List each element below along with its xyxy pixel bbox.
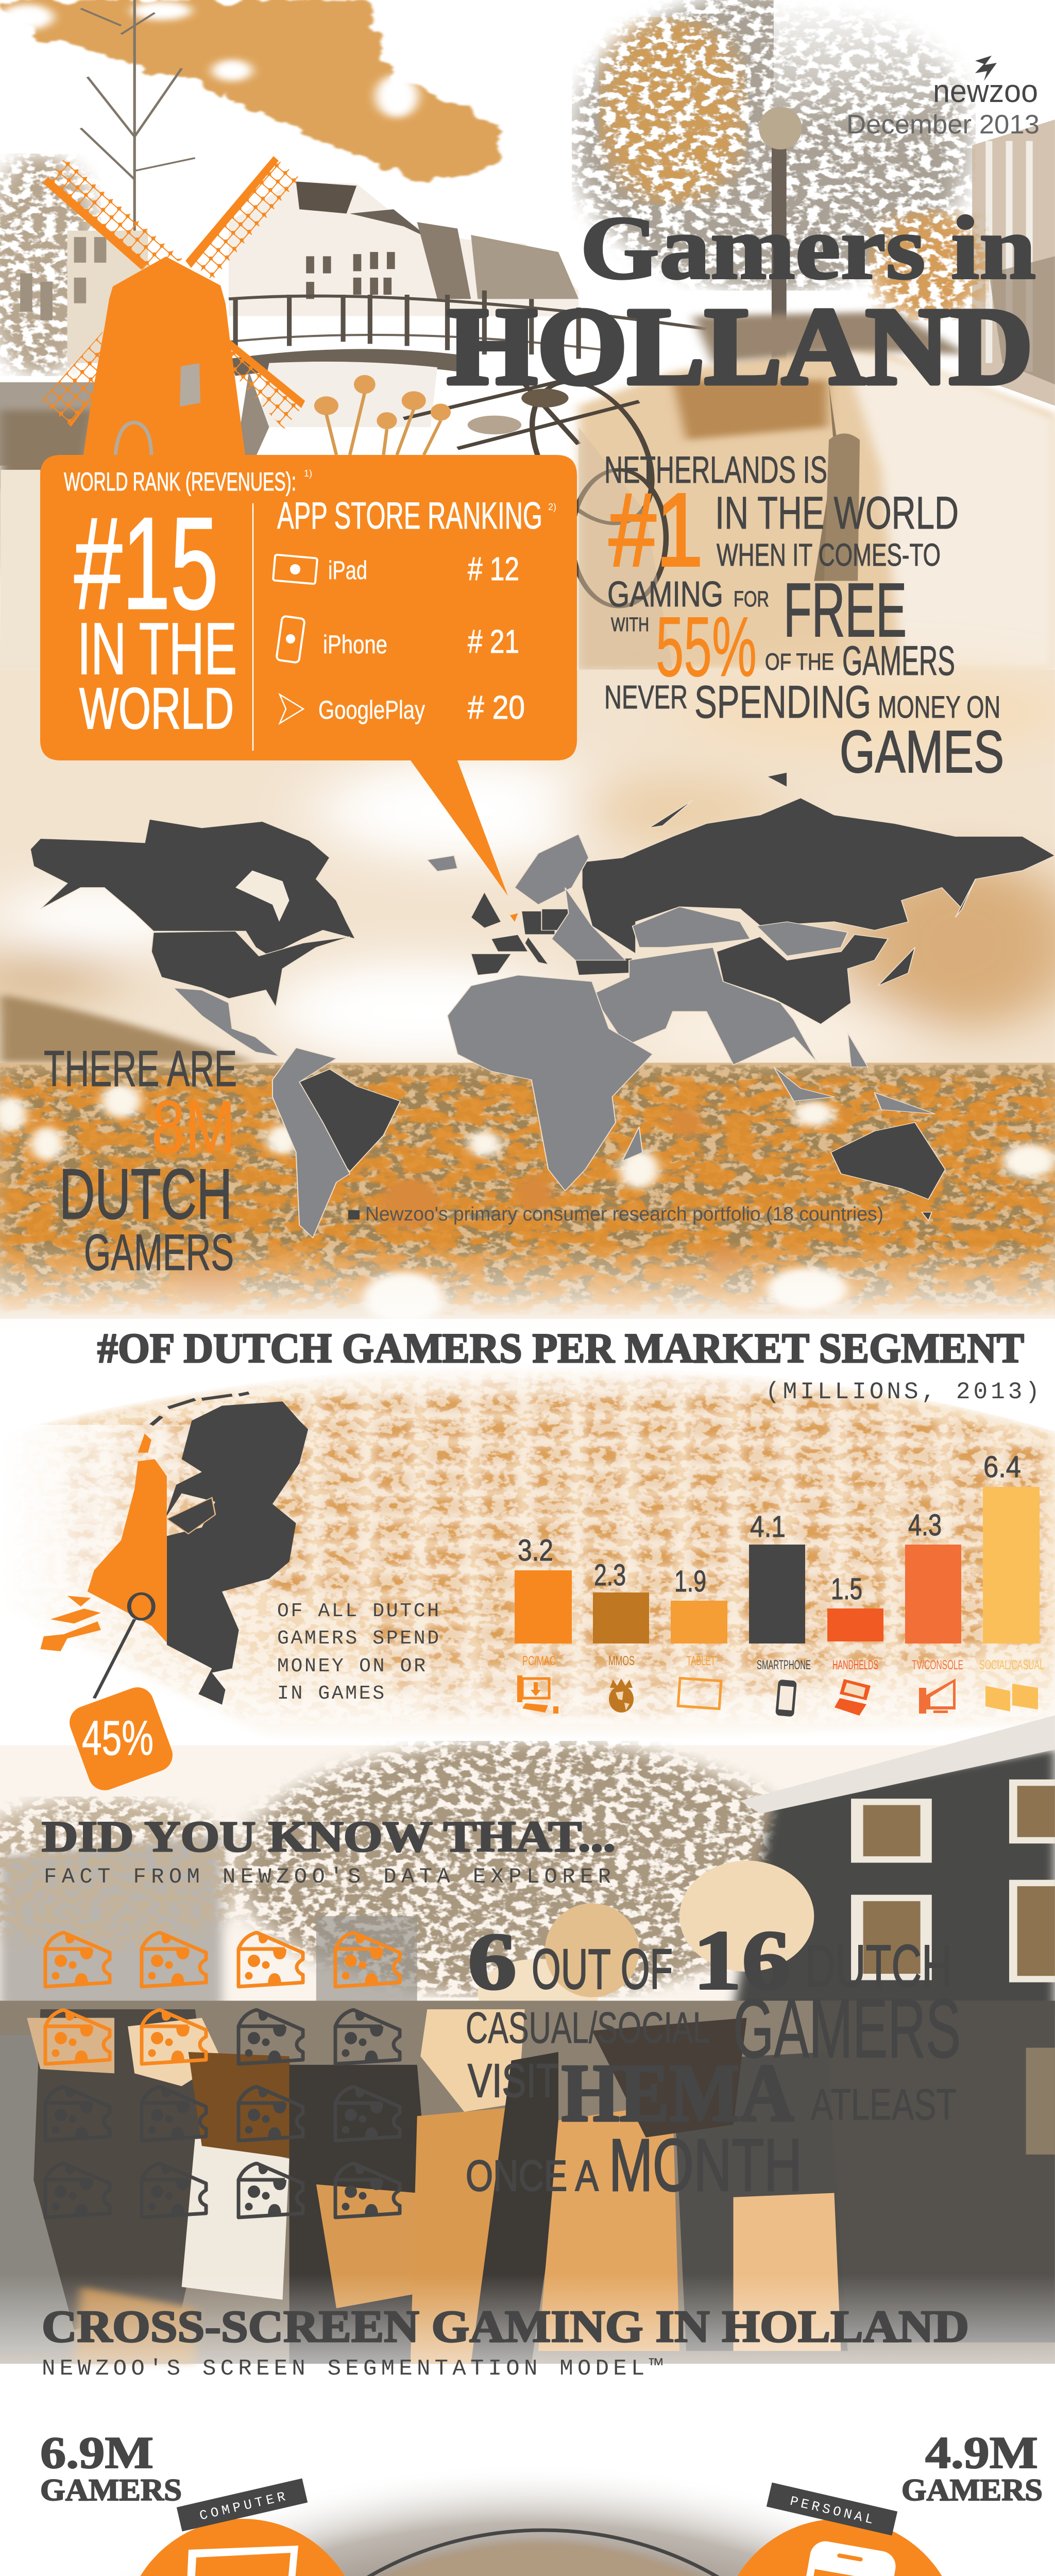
callout: HEMA fact: VISIT bbox=[468, 2055, 558, 2107]
callout: number one in free gaming: #1 bbox=[609, 471, 703, 588]
45% badge bbox=[65, 1683, 177, 1795]
bar labels: MMOS bbox=[608, 1654, 635, 1668]
segment sizes: GAMERS bbox=[901, 2473, 1043, 2507]
callout: number one in free gaming: NEVER bbox=[604, 679, 688, 716]
map: the Netherlands highlighted bbox=[510, 913, 518, 922]
bar values: 2.3 bbox=[594, 1558, 626, 1592]
world rank: 1) bbox=[304, 468, 312, 479]
bar chart: gamers per segment bbox=[515, 1450, 1044, 1717]
icon: iPhone bbox=[276, 616, 305, 663]
background photo: sky and tulip field bbox=[0, 670, 1055, 1340]
title bbox=[447, 198, 1036, 408]
callout: HEMA fact: 6 bbox=[468, 1917, 517, 2007]
title: HOLLAND bbox=[447, 285, 1033, 408]
map: other countries bbox=[174, 834, 935, 1238]
callout: HEMA fact: HEMA bbox=[561, 2047, 794, 2139]
white veil under heading bbox=[0, 1319, 1055, 1370]
text: share spending bbox=[277, 1600, 439, 1705]
map: countries covered by primary research bbox=[30, 772, 1055, 1221]
callout: number one in free gaming bbox=[604, 449, 1004, 785]
callout: HEMA fact: DUTCH bbox=[805, 1933, 952, 1999]
segment sizes: 4.9M bbox=[925, 2428, 1038, 2478]
world map bbox=[30, 772, 1055, 1238]
text: share spending: OF ALL DUTCH bbox=[277, 1600, 439, 1622]
circle: computer bbox=[123, 2519, 363, 2576]
callout: number one in free gaming: FREE bbox=[784, 568, 907, 653]
background photo: orange-clad crowd and houses bbox=[0, 1716, 1055, 2505]
heading: cross-screen gaming: NEWZOO'S SCREEN SEGMENTATION MODEL™ bbox=[42, 2356, 663, 2382]
bar values: 1.9 bbox=[674, 1565, 706, 1598]
heading: market segment: #OF DUTCH GAMERS PER MARKET SEGMENT bbox=[97, 1325, 1024, 1371]
bar labels: PC/MAC bbox=[522, 1654, 556, 1668]
bar labels: TV/CONSOLE bbox=[912, 1658, 963, 1672]
screen labels: COMPUTER bbox=[198, 2489, 287, 2524]
callout: HEMA fact: ATLEAST bbox=[811, 2080, 957, 2129]
screen labels: PERSONAL bbox=[789, 2494, 875, 2528]
world rank: IN THE bbox=[77, 608, 237, 690]
callout: 8M Dutch gamers bbox=[44, 1040, 237, 1281]
bar labels: SMARTPHONE bbox=[757, 1658, 811, 1672]
bar labels: HANDHELDS bbox=[832, 1658, 878, 1672]
text: share spending: GAMERS SPEND bbox=[277, 1628, 439, 1650]
callout: number one in free gaming: GAMING bbox=[607, 574, 723, 614]
speech bubble: rankings bbox=[40, 455, 577, 896]
callout: 8M Dutch gamers: GAMERS bbox=[84, 1224, 234, 1281]
world rank: WORLD bbox=[79, 676, 234, 741]
bar values: 1.5 bbox=[831, 1572, 862, 1606]
text: share spending: IN GAMES bbox=[277, 1683, 384, 1705]
app store ranking: GooglePlay bbox=[318, 696, 425, 724]
callout: HEMA fact: OUT OF bbox=[532, 1938, 673, 2001]
connecting ring bbox=[212, 2530, 874, 2576]
icon: windmill bbox=[42, 156, 305, 455]
callout: number one in free gaming: IN THE WORLD bbox=[715, 487, 959, 538]
background photo: DJ above crowd bbox=[0, 2463, 1055, 2576]
app store ranking: # 12 bbox=[468, 550, 519, 587]
background photo: Amsterdam canal street with sky bbox=[0, 0, 1055, 670]
app store ranking: # 21 bbox=[468, 623, 519, 660]
callout: HEMA fact: MONTH bbox=[609, 2124, 802, 2207]
world rank bbox=[64, 467, 312, 741]
heading: cross-screen gaming bbox=[42, 2302, 969, 2382]
icon: iPad bbox=[273, 555, 317, 584]
app store ranking: APP STORE RANKING bbox=[277, 495, 542, 537]
45% badge: 45% bbox=[82, 1711, 154, 1766]
heading: did you know bbox=[42, 1812, 616, 1889]
heading: market segment: (MILLIONS, 2013) bbox=[765, 1379, 1040, 1405]
bar values: 4.1 bbox=[750, 1510, 786, 1544]
callout: HEMA fact: 16 bbox=[693, 1913, 791, 2007]
segment sizes: 6.9M bbox=[40, 2428, 154, 2478]
heading: cross-screen gaming: CROSS-SCREEN GAMING IN HOLLAND bbox=[42, 2302, 969, 2352]
segment sizes bbox=[39, 2428, 1043, 2576]
app store ranking: iPhone bbox=[323, 630, 387, 659]
callout: number one in free gaming: MONEY ON bbox=[878, 690, 1000, 724]
segment sizes: GAMERS bbox=[40, 2473, 182, 2507]
bar values: 4.3 bbox=[908, 1509, 942, 1542]
callout: number one in free gaming: WITH bbox=[611, 614, 649, 636]
callout: number one in free gaming: WHEN IT COMES-TO bbox=[717, 537, 941, 572]
heading: market segment bbox=[97, 1325, 1040, 1405]
newzoo logo and date: December 2013 bbox=[846, 110, 1040, 140]
callout: number one in free gaming: 55% bbox=[656, 599, 757, 694]
bar labels bbox=[522, 1654, 1044, 1672]
newzoo logo and date bbox=[846, 56, 1040, 140]
callout: number one in free gaming: GAMERS bbox=[842, 638, 955, 684]
map legend: Newzoo's primary consumer research portfolio (18 countries) bbox=[365, 1204, 883, 1225]
diagram: screen segmentation bbox=[39, 2428, 1043, 2576]
map: Netherlands bbox=[40, 1393, 439, 1795]
callout: number one in free gaming: NETHERLANDS IS bbox=[604, 449, 827, 491]
callout: HEMA fact: CASUAL/SOCIAL bbox=[466, 2004, 710, 2053]
title: Gamers in bbox=[580, 198, 1036, 298]
world rank: WORLD RANK (REVENUES): bbox=[64, 467, 296, 496]
callout: 8M Dutch gamers: 8M bbox=[151, 1085, 235, 1168]
app store ranking: # 20 bbox=[468, 689, 525, 726]
callout: HEMA fact bbox=[466, 1913, 961, 2207]
heading: did you know: DID YOU KNOW THAT... bbox=[42, 1812, 616, 1861]
callout: number one in free gaming: OF THE bbox=[765, 649, 834, 675]
bar values: 3.2 bbox=[518, 1534, 553, 1567]
icon: Google Play bbox=[280, 694, 303, 723]
callout: 8M Dutch gamers: DUTCH bbox=[59, 1155, 232, 1234]
app store ranking bbox=[273, 495, 556, 726]
screen labels bbox=[168, 2478, 912, 2576]
world rank: #15 bbox=[74, 490, 218, 636]
text: share spending: MONEY ON OR bbox=[277, 1655, 426, 1677]
callout: number one in free gaming: FOR bbox=[734, 587, 769, 612]
newzoo logo and date: newzoo bbox=[933, 74, 1038, 109]
bar values: 6.4 bbox=[983, 1450, 1021, 1484]
bar labels: TABLET bbox=[687, 1654, 716, 1668]
app store ranking: iPad bbox=[328, 556, 367, 585]
bar icons bbox=[517, 1675, 1038, 1717]
heading: did you know: FACT FROM NEWZOO'S DATA EXPLORER bbox=[44, 1865, 611, 1889]
app store ranking: 2) bbox=[548, 502, 556, 512]
bar values bbox=[518, 1450, 1021, 1606]
callout: number one in free gaming: GAMES bbox=[840, 718, 1004, 785]
circle: personal bbox=[720, 2519, 960, 2576]
pictogram: 6 of 16 cheese wedges bbox=[45, 1933, 400, 2217]
background photo: stroopwafel bbox=[0, 1340, 1055, 1745]
callout: HEMA fact: ONCE A bbox=[466, 2151, 599, 2200]
callout: number one in free gaming: SPENDING bbox=[694, 676, 871, 727]
callout: 8M Dutch gamers: THERE ARE bbox=[44, 1040, 237, 1097]
